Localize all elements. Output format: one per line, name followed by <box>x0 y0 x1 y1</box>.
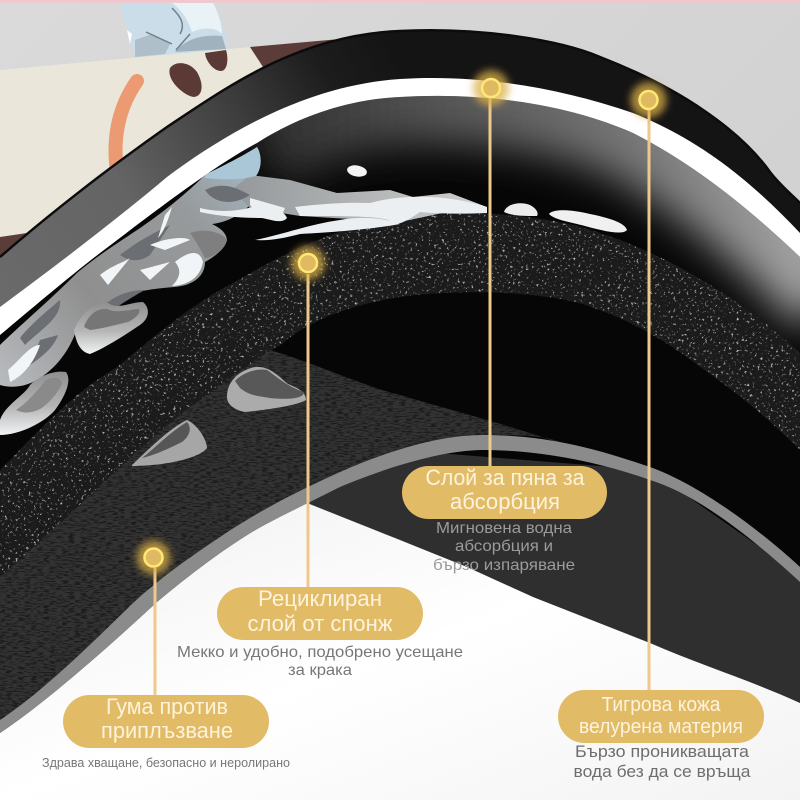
marker: sponge layer <box>291 246 325 280</box>
water: main splash along band <box>0 147 261 387</box>
description: tiger-skin velour: вода без да се връща <box>574 762 751 781</box>
marker: rubber layer <box>136 540 170 574</box>
label pill: recycled sponge layer: слой от спонж <box>248 611 393 636</box>
panel: inner dark foam cavity <box>0 96 800 733</box>
water: darker patches <box>20 186 250 365</box>
illustration: water absorbed into layers <box>0 147 627 466</box>
panel: printed top fabric <box>0 39 340 258</box>
description: anti-slip rubber: Здрава хващане, безопасно и неролирано <box>42 756 290 770</box>
label pill: recycled sponge layer <box>217 586 423 640</box>
marker: foam layer <box>473 70 509 106</box>
description: absorption foam layer <box>433 520 575 574</box>
label pill: anti-slip rubber: Гума против <box>106 694 228 719</box>
description: absorption foam layer: абсорбция и <box>455 538 553 555</box>
water: lobe droplet <box>190 231 227 258</box>
panel: band top edge <box>0 30 800 257</box>
water: white ribbons and lumps <box>200 197 487 240</box>
label pill: absorption foam layer: Слой за пяна за <box>426 465 585 490</box>
label pill: absorption foam layer: абсорбция <box>450 489 560 514</box>
water: lower-left droplet <box>0 372 68 435</box>
leader line: foam <box>488 98 492 466</box>
description: tiger-skin velour: Бързо проникващата <box>575 742 750 761</box>
water: upper grey ribbon <box>232 175 487 222</box>
panel: anti-slip rubber surface <box>0 350 559 720</box>
panel: absorbent foam insole underside <box>295 450 800 703</box>
water: tiny oval droplet <box>346 164 368 178</box>
panel: recycled sponge layer <box>0 200 800 600</box>
panel: white layer band <box>0 78 800 335</box>
top pink edge <box>0 0 800 2</box>
water: top blue tint <box>205 147 261 179</box>
leader line: velour <box>648 110 650 690</box>
description: recycled sponge layer: за крака <box>288 662 352 679</box>
water: droplet on foam one <box>504 203 538 216</box>
panel: grey rubber edge strip <box>0 435 800 733</box>
description: tiger-skin velour <box>574 742 751 781</box>
leader line: sponge <box>306 274 310 587</box>
label pill: recycled sponge layer: Рециклиран <box>258 586 382 611</box>
label pill: anti-slip rubber: приплъзване <box>101 718 233 743</box>
description: absorption foam layer: Мигновена водна <box>436 520 572 537</box>
water: mid droplet <box>132 420 207 466</box>
description: absorption foam layer: бързо изпаряване <box>433 557 575 574</box>
water: shoe droplet <box>74 302 148 354</box>
label pill: tiger-skin velour <box>558 690 764 743</box>
panel: white lower background <box>0 503 800 800</box>
illustration: water splash above mat <box>120 3 227 57</box>
label pill: absorption foam layer <box>402 465 607 519</box>
description: recycled sponge layer <box>177 644 463 679</box>
label pill: tiger-skin velour: Тигрова кожа <box>602 694 721 716</box>
description: recycled sponge layer: Мекко и удобно, подобрено усещане <box>177 644 463 661</box>
water: white highlights <box>8 207 203 382</box>
leader line: rubber <box>154 568 156 695</box>
water: right droplet <box>227 367 306 412</box>
label pill: tiger-skin velour: велурена материя <box>579 716 743 738</box>
water: droplet on foam two <box>549 210 627 233</box>
label pill: anti-slip rubber <box>63 694 269 748</box>
marker: velour layer <box>630 82 666 118</box>
